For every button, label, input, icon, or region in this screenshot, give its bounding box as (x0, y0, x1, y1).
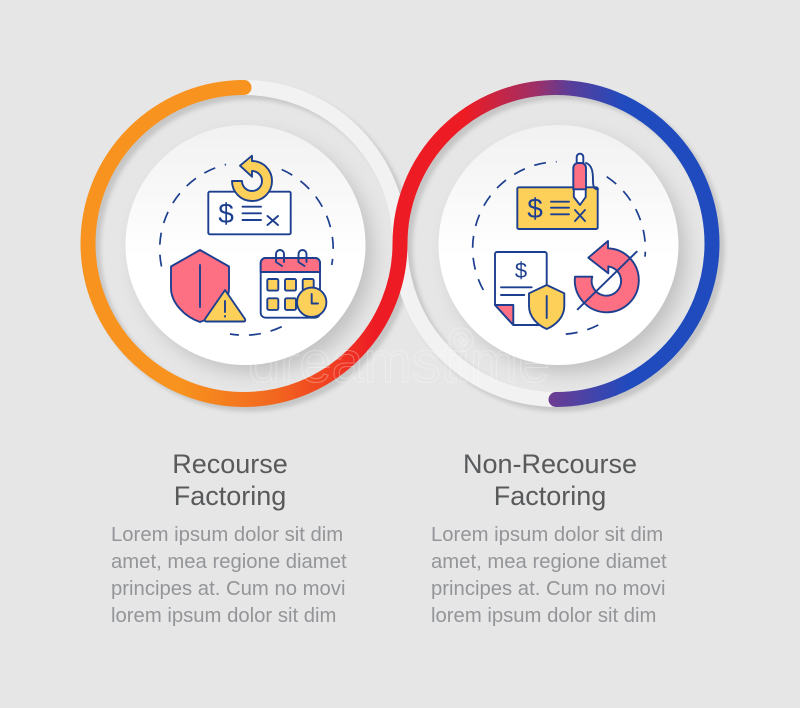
track: left ring remainder (244, 88, 400, 244)
body text: right: amet, mea regione diamet (431, 551, 667, 573)
icon group: non-recourse factoring (473, 154, 645, 334)
right progress ring: red to blue (400, 88, 712, 400)
icon: pen (573, 154, 598, 205)
dashed circle (473, 162, 645, 334)
icon: cheque: $ (218, 198, 234, 229)
disc: right (438, 125, 678, 365)
icon: document with shield: $ (515, 258, 527, 283)
ring shadows (93, 92, 717, 404)
icon: warning triangle (205, 290, 245, 322)
heading: non-recourse factoring: Non-Recourse (463, 449, 637, 479)
icon: signed cheque: $ (527, 193, 543, 224)
heading: non-recourse factoring: Factoring (494, 481, 606, 511)
icon: signed cheque (517, 187, 598, 229)
body text: left: Lorem ipsum dolor sit dim (111, 524, 343, 546)
watermark: dreamstime (248, 330, 550, 395)
left progress ring: orange to red (88, 88, 400, 400)
body text: right: principes at. Cum no movi (431, 578, 665, 600)
icon: cheque (208, 192, 291, 234)
disc shadows (135, 135, 686, 373)
heading: recourse factoring: Recourse (172, 449, 288, 479)
dashed circle (160, 164, 333, 335)
icon: document with shield (495, 252, 564, 329)
icon: crossed-out circular arrow (575, 241, 639, 312)
body text: right: lorem ipsum dolor sit dim (431, 605, 656, 627)
icon: shield (171, 250, 229, 322)
disc: left (126, 125, 366, 365)
icon: calendar with clock (261, 250, 326, 318)
heading: recourse factoring: Factoring (174, 481, 286, 511)
body text: right: Lorem ipsum dolor sit dim (431, 524, 663, 546)
icon: circular return arrow (232, 156, 272, 201)
background fill inside the rings (111, 110, 703, 392)
body text: left: lorem ipsum dolor sit dim (111, 605, 336, 627)
icon group: recourse factoring (160, 156, 333, 335)
body text: left: amet, mea regione diamet (111, 551, 347, 573)
track: right ring remainder (400, 244, 556, 400)
body text: left: principes at. Cum no movi (111, 578, 345, 600)
